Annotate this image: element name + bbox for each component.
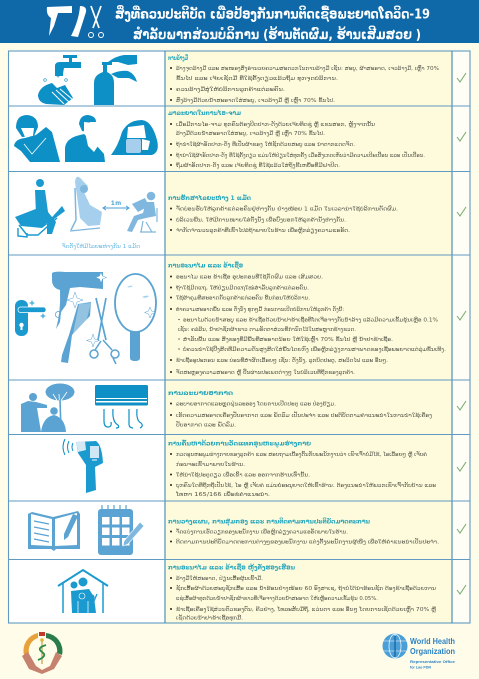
- icon: people coughing and wearing mask: [14, 115, 158, 162]
- panel: hand washing: [38, 53, 466, 105]
- text: temperature screening: [168, 438, 437, 498]
- text: cleaning and disinfection: ໃຊ້ຜ້າຄຸມທີ່ສະອາດກັບລູກຄ້າແຕ່ລະຄົນ ຂື້ນກ່ອນໃຫ້ບໍລິການ.: [176, 294, 310, 302]
- text: ventilation: [168, 390, 432, 428]
- text: ventilation: ເຮັດຄວາມສະອາດເຄື່ອງປັບອາກາດ ແລະ ພັດລົມ ເປັນປະຈຳ ແລະ ປະຕິບັດຕາມຄຳແນະນຳໃນການນຳໃຊ້ເຄື່ອງ: [176, 411, 432, 419]
- panel: temperature screening: [63, 438, 466, 498]
- text: cough etiquette: ຖ້ານຳໃຊ້ຜ້າອັດປາກ-ດັງ ທີ່ເປັນຜ້າຂອງ ໃຫ້ຊັກດ້ວຍສະບູ ແລະ ນຳຕາກແດດຈັດ.: [175, 140, 355, 148]
- logo: World Health Organization: [382, 634, 455, 670]
- text: hand washing: ລ້າງຈຸດລ້າງມື ແລະ ສະໜອງສິ່ງອຳນວຍຄວາມສະດວກໃນການລ້າງມື ເຊັ່ນ: ສະບູ, ຜ້າສະອາດ, ເຈວລ້າງມື, ເຫຼົ້າ 70%: [175, 65, 439, 72]
- icon: people seated one metre apart: 1 m: [111, 200, 121, 207]
- caption: ຈັດຕັ່ງໃຫ້ມີໄລຍະຫ່າງກັນ 1 ແມັດ: [62, 242, 140, 250]
- text: distancing: ການຮັກສາໄລຍະຫ່າງ 1 ແມັດ: [168, 193, 251, 202]
- icon: hair dryer, comb and scissors: [47, 6, 104, 38]
- text: temperature screening: ການຄົ້ນຫາດ້ວຍການວັດແທກອຸນຫະພູມຮ່າງກາຍ: [168, 438, 311, 448]
- panel: distancing: [15, 177, 466, 250]
- panel: records and monitoring: [28, 505, 466, 555]
- text: cleaning and disinfection: ທຳຄວາມສະອາດພື້ນ ແລະ ຕັ່ງນັ່ງ ທຸກໆມື້ ກ່ອນການເປີດບໍລິການໃຫ້ລູກຄ້າ ດັ່ງນີ້:: [176, 305, 344, 313]
- text: household hygiene: [168, 562, 437, 622]
- icon: open book and calendar with pencil: [28, 505, 144, 555]
- text: hand washing: [168, 53, 439, 104]
- icon: check mark: [457, 585, 466, 594]
- text: household hygiene: ຂ້າເຊື້ອເຄື່ອງໃຊ້ສ່ວນຕົວຂອງຕົນ, ຄີວຢ່າງ, ໂທລະສັບມືຖື, ແວ່ນຕາ ແລະ ອື່ນໆ ໂດຍການເຊັດດ້ວຍເຫຼົ້າ 70% ຫຼື: [176, 606, 437, 613]
- panel: cough etiquette: [14, 109, 466, 170]
- text: distancing: ບໍລິເວນພື້ນ, ໃຫ້ມີການໝາຍໃສ່ຕັ່ງນັ່ງ ເພື່ອບົ່ງບອກໃຫ້ລູກຄ້ານັ່ງຫ່າງກັນ.: [176, 216, 346, 224]
- logo: World Health Organization: Organization: [410, 646, 455, 656]
- icon: check mark: [457, 207, 466, 216]
- text: distancing: ຈຳກັດຈຳນວນລູກຄ້າທີ່ເຂົ້າໄປລໍຖ້າພາຍໃນຮ້ານ ເພື່ອຫຼີກລ່ຽງຄວາມແອອັດ.: [176, 226, 350, 234]
- text: distancing: [168, 193, 398, 234]
- text: household hygiene: ລ້າງມືໃຫ້ສະອາດ, ປ່ຽນເສື້ອຜຸ້ນເຂົ້າມື.: [175, 575, 263, 582]
- text: records and monitoring: [168, 516, 439, 546]
- text: cough etiquette: ມາລະຍາດໃນການໄອ-ຈາມ: [168, 109, 241, 117]
- text: hand washing: ຂຶ້ນໄປ ແລະ ເຈ້ຍເຊັດມື ທີ່ໃຊ້ຄັ້ງດຽວແລ້ວຖິ້ມ ທຸກຈຸດບໍລິການ.: [176, 74, 338, 82]
- header band: [0, 0, 479, 43]
- text: household hygiene: ແຊ່ເສື້ອຜ້າທຸກດ້ວຍນ້ຳຢາຊັກຜ້າຂາວທີ່ເຈືອຈາງດ້ວຍນ້ຳສະອາດ ໃຫ້ເຫຼືອຄວາມເຂັ້ມຂຸ້ນ 0.05%.: [176, 595, 378, 602]
- text: hand washing: ການລ້າງມື: [168, 53, 189, 62]
- icon: check mark: [457, 311, 466, 320]
- text: cough etiquette: ລ້າງມືດ້ວຍນ້ຳສະອາດໃສ່ສະບູ, ເຈວລ້າງມື ຫຼື ເຫຼົ້າ 70% ຂຶ້ນໄປ.: [175, 129, 325, 137]
- title: ສຳລັບພາກສ່ວນບໍລິການ (ຮ້ານຕັດຜົມ, ຮ້ານເສີມສວຍ ): [133, 27, 421, 43]
- logo: ministry of health emblem: [22, 632, 62, 674]
- text: hand washing: ຄວນລ້າງມືສູ່ໃຫ້ບໍລິການລູກຄ້າແຕ່ລະຄົນ.: [176, 86, 285, 93]
- text: cleaning and disinfection: ຈັດສະຫຼອງຄວາມສະອາດ ຫຼື ປື້ນຜ່ານປະເພດຕ່າງໆ ໃນບໍລິເວນທີ່ຖືກຂອງລູກຄ້າ.: [175, 368, 355, 376]
- text: cough etiquette: [168, 109, 425, 170]
- icon: family in a house: [58, 570, 108, 613]
- text: ventilation: ປັບອາກາດ ແລະ ພັດລົມ.: [175, 421, 236, 428]
- icon: haircut under a tree and air conditioner: [21, 384, 148, 432]
- icon: check mark: [457, 462, 466, 471]
- panel: cleaning and disinfection: [15, 260, 466, 376]
- panel: household hygiene: [58, 562, 466, 622]
- text: household hygiene: ເຊັດດ້ວຍນ້ຳຢາຂ້າເຊື້ອທຸກມື້.: [176, 614, 243, 622]
- text: records and monitoring: ຕິດຕາມການປະຕິບັດມາດຕະການຕ່າງໆຂອງພະນັກງານ ແຕ່ງຕັ້ງພະນັກງານຜູ້ໜຶ່ງ ເພື່ອໃຫ້ຄຳແນະນຳເປັນປະຈຳ.: [175, 538, 439, 546]
- text: temperature screening: ກ່ອນຈະເຂົ້າມາພາຍໃນຮ້ານ.: [176, 461, 245, 468]
- icon: check mark: [457, 73, 466, 82]
- text: temperature screening: ໃຫ້ນຳໃຊ້ປະຕູດຽວ ເພື່ອເຂົ້າ ແລະ ອອກຈາກຮ້ານເທົ່ານັ້ນ.: [176, 471, 310, 478]
- text: temperature screening: ໂທຫາ 165/166 ເພື່ອຂໍຄຳແນະນຳ.: [175, 491, 270, 498]
- panel: ventilation: [21, 384, 466, 432]
- text: ventilation: ການລະບາຍອາກາດ: [168, 390, 233, 397]
- text: cleaning and disinfection: ສຳລັບພື້ນ ແລະ ສິ່ງຂອງທີ່ມີພື້ນທີ່ສະອາດນ້ອຍ ໃຫ້ໃຊ້ເຫຼົ້າ 70% ຂຶ້ນໄປ ຫຼື ນ້ຳຢາຂ້າເຊື້ອ.: [183, 335, 393, 343]
- text: hand washing: ສົ່ງລ້າງມືດ້ວຍນ້ຳສະອາດໃສ່ສະບູ, ເຈວລ້າງມື ຫຼື ເຫຼົ້າ 70% ຂຶ້ນໄປ.: [176, 96, 335, 104]
- text: cleaning and disinfection: ຂ້າເຊື້ອອຸປະກອນ ແລະ ບ່ອນທີ່ສຳຜັດເລື້ອຍໆ ເຊັ່ນ: ຕັ່ງນັ່ງ, ລູກບິດປະຕູ, ສະວິດໄຟ ແລະ ອື່ນໆ.: [176, 356, 388, 364]
- text: temperature screening: ກວດອຸນຫະພູມຮ່າງກາຍຂອງລູກຄ້າ ແລະ ສອບຖາມເບື້ອງຕົ້ນກັບພະນັກງານວ່າ ເຂົາເຈົ້າບໍ່ມີໄຂ້, ໄອເລື້ອຍໆ ຫຼື ເຈັບຄໍ: [176, 450, 427, 458]
- icon: check mark: [457, 524, 466, 533]
- text: cleaning and disinfection: ບໍ່ຄວນນຳໃຊ້ປື້ງສີດທີ່ມີຄວາມດັນສູງສີດໃສ່ພື້ນໄດຍກົງ ເພື່ອຫຼີກລ່ຽງການສາພາດຂອງເຊື້ອພະຍາດແຕ່ລຸ່ມຂຶ້ນເທີງ.: [183, 345, 446, 353]
- text: cleaning and disinfection: ເຊັ່ນ: ຄລໍລີນ, ນ້ຳຢາຊັກຜ້າຂາວ ຕາມອັດຕາສ່ວນທີ່ກຳນົດໄວ້ໃນສະຫຼາກຂ້າງຂວດ.: [178, 325, 356, 333]
- text: cleaning and disinfection: ຖ້າໃຊ້ມີດແຖ, ໃຫ້ປ່ຽນມີດແຖໃໝ່ສຳລັບລູກຄ້າແຕ່ລະຄົນ.: [175, 284, 309, 292]
- text: temperature screening: ບຸກຄົນໃດທີ່ຖືກຖືເປັນໄຂ້, ໄອ ຫຼື ເຈັບຄໍ ແມ່ນບໍ່ອະນຸຍາດໃຫ້ເຂົ້າຮ້ານ. ຕ້ອງແນະນຳໃຫ້ພວກເຂົາເຈົ້າກັບບ້ານ ແລະ: [176, 481, 437, 489]
- text: cough etiquette: ຖິ້ມຜ້າອັດປາກ-ດັງ ແລະ ເຈ້ຍທິດຊູ່ ທີ່ໃຊ້ແລ້ວໃສ່ຖັງຂີ້ເຫຍື້ອທີ່ມີຝາປິດ.: [175, 161, 340, 170]
- icon: people seated one metre apart: [15, 177, 157, 237]
- icon: check mark: [457, 401, 466, 410]
- text: cough etiquette: ເມື່ອມີການໄອ-ຈາມ ທຸກຄົນຕ້ອງປິດປາກ-ດັງດ້ວຍເຈ້ຍທິດຊູ່ ຫຼື ແຂນສອກ, ຫຼັງຈາກນັ້ນ: [176, 120, 375, 129]
- icon: infrared thermometer: [63, 439, 103, 493]
- text: cleaning and disinfection: ອະນາໄມ ແລະ ຂ້າເຊື້ອ ອຸປະກອນທີ່ໃຊ້ຕັດຜົມ ແລະ ເສີມສວຍ.: [176, 272, 323, 280]
- text: household hygiene: ການອະນາໄມ ແລະ ຂ້າເຊື້ອ ຫຸ້ງຕັ່ງຮອງເຮືອນ: [168, 562, 295, 572]
- text: cleaning and disinfection: ການອະນາໄມ ແລະ ຂ້າເຊື້ອ: [168, 260, 243, 270]
- text: household hygiene: ຊັກເສື້ອຜ້າດ້ວຍສະບູຊັກເສື້ອ ແລະ ນ້ຳຮ້ອນຢ່າງໜ້ອຍ 60 ອົງສາເຊ, ຖ້າບໍ່ໄດ້ນຳຮ້ອນຊັກ ຕ້ອງຂ້າເຊື້ອດ້ວຍການ: [176, 584, 436, 592]
- text: records and monitoring: ການວາງແຜນ, ການສຸ່ມກອງ ແລະ ການຕິດຕາມການປະຕິບັດມາດຕະການ: [168, 516, 370, 526]
- text: records and monitoring: ຈັດແບ່ງການເຮັດວຽກຂອງພະນັກງານ ເພື່ອຫຼີກລ່ຽງຄວາມແອອັດພາຍໃນຮ້ານ.: [175, 528, 348, 536]
- text: cleaning and disinfection: [168, 260, 446, 376]
- title: [115, 6, 430, 43]
- text: cleaning and disinfection: ອະນາໄມດ້ວຍນ້ຳສະບູ ແລະ ຂ້າເຊື້ອດ້ວຍນ້ຳຢາຂ້າເຊື້ອທີ່ໂຕເຈືອຈາງກັບນ້ຳລ້າງ ແລ້ວມີຄວາມເຂັ້ມຂຸ້ນເຫຼືອ 0.1%: [183, 316, 438, 324]
- text: cough etiquette: ຖ້ານຳໃຊ້ຜ້າອັດປາກ-ດັງ ທີ່ໃຊ້ຄັ້ງດຽວ ແມ່ນໃຫ້ປ່ຽນໃສ່ທຸກຄັ້ງ ເມື່ອສັງເກດເຫັນວ່າມີຄວາມເປິະເປື້ອນ ແລະ ເປັນເປື້ອນ.: [175, 151, 425, 159]
- icon: faucet, hand washing and soap dispenser: [38, 55, 137, 105]
- text: distancing: ຈັດບ່ອນຮັບໃຫ້ລູກຄ້າແຕ່ລະຄົນຢູ່ຫ່າງກັນ ຢ່າງໜ້ອຍ 1 ແມັດ ໃນເວລານຳໃຊ້ບໍລິການຕັດຜົມ.: [175, 205, 398, 212]
- logo: World Health Organization: for Lao PDR: [410, 666, 431, 670]
- text: ventilation: ລະບາຍອາກາດແລະຫຼຸດຝຸ່ນລະອອງ ໂດຍການເປີດປະຕູ ແລະ ປ່ອງຢ້ຽມ.: [176, 400, 336, 408]
- title: ສິ່ງທີ່ຄວນປະຕິບັດ ເພື່ອປ້ອງກັນການຕິດເຊື້ອພະຍາດໂຄວິດ-19: [115, 6, 430, 22]
- icon: check mark: [457, 132, 466, 141]
- logo: World Health Organization: Representative Office: [410, 660, 455, 664]
- icon: door handle, dryer, comb, scissors and mirror: [15, 272, 156, 364]
- logo: World Health Organization: World Health: [410, 636, 455, 646]
